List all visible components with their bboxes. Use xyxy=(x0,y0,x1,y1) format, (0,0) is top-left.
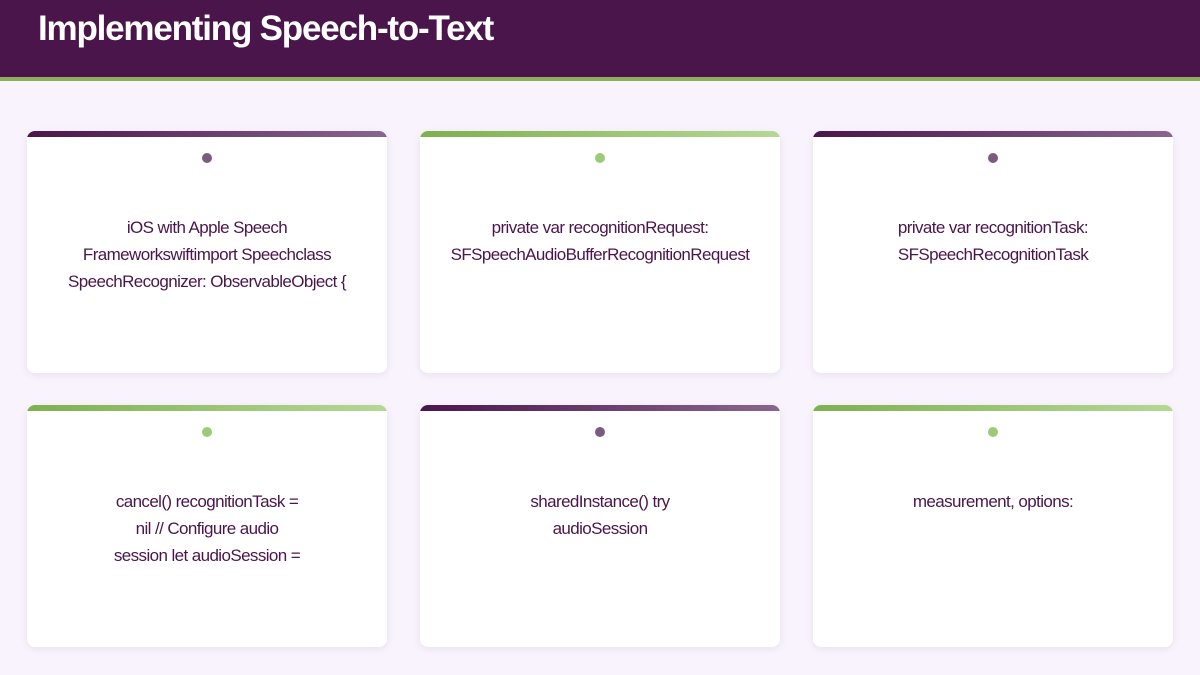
card text xyxy=(68,218,346,291)
card text: private var recognitionRequest: xyxy=(492,218,708,237)
card text: iOS with Apple Speech xyxy=(127,218,287,237)
card text: SFSpeechRecognitionTask xyxy=(898,245,1088,264)
card text xyxy=(114,492,300,565)
card text xyxy=(451,218,750,264)
card 6 xyxy=(813,405,1173,647)
card text: sharedInstance() try xyxy=(530,492,670,511)
card 5 xyxy=(420,405,780,647)
dot xyxy=(595,153,605,163)
card text: measurement, options: xyxy=(913,492,1073,511)
dot xyxy=(202,427,212,437)
card text: SpeechRecognizer: ObservableObject { xyxy=(68,272,346,291)
card text: Frameworkswiftimport Speechclass xyxy=(83,245,331,264)
card 1 xyxy=(27,131,387,373)
dot xyxy=(988,427,998,437)
header xyxy=(0,0,1200,81)
dot xyxy=(988,153,998,163)
dot xyxy=(595,427,605,437)
card text: private var recognitionTask: xyxy=(898,218,1088,237)
card text: SFSpeechAudioBufferRecognitionRequest xyxy=(451,245,749,264)
card text: session let audioSession = xyxy=(114,546,300,565)
card text: cancel() recognitionTask = xyxy=(116,492,298,511)
card 2 xyxy=(420,131,780,373)
card 3 xyxy=(813,131,1173,373)
title: Implementing Speech-to-Text xyxy=(38,9,493,48)
dot xyxy=(202,153,212,163)
card 4 xyxy=(27,405,387,647)
card text xyxy=(530,492,670,538)
card text: audioSession xyxy=(553,519,647,538)
card text: nil // Configure audio xyxy=(136,519,278,538)
card text xyxy=(898,218,1089,264)
